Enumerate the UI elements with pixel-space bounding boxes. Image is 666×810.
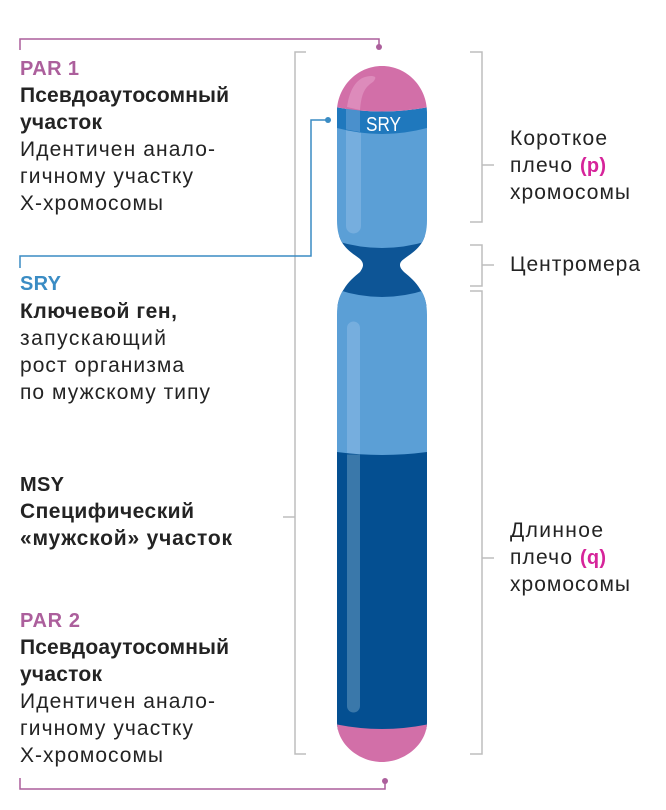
text block: PAR 2: PAR 2 (20, 610, 80, 632)
text block: PAR 1: PAR 1 (20, 58, 79, 80)
text block: PAR 2: участок (20, 663, 102, 686)
long arm dark part: MSY (337, 452, 427, 730)
bracket: centromere (470, 245, 494, 286)
text block: SRY: SRY (20, 273, 62, 295)
chromosome (337, 66, 427, 762)
long arm upper light part (337, 291, 427, 455)
text block: SRY: Ключевой ген, (20, 300, 177, 323)
highlight: PAR 1 (347, 76, 375, 110)
text block: PAR 1: Идентичен анало- (20, 138, 215, 161)
SRY band (337, 107, 427, 134)
connector: SRY (20, 117, 331, 268)
PAR 1 cap (337, 66, 427, 112)
label: long arm: (q) (580, 547, 606, 569)
text block: PAR 2: Псевдоаутосомный (20, 636, 229, 659)
label: long arm (510, 519, 630, 596)
label: long arm: Длинное (510, 519, 603, 542)
label: long arm: плечо (510, 546, 572, 569)
short arm (337, 128, 427, 248)
bracket: short arm (470, 52, 494, 222)
highlight: SRY band (346, 106, 360, 132)
text block: PAR 2: Идентичен анало- (20, 690, 215, 713)
centromere (338, 236, 426, 306)
SRY label: SRY (366, 114, 401, 136)
text block: SRY (20, 273, 210, 404)
text block: PAR 1 (20, 58, 229, 215)
text block: PAR 1: Псевдоаутосомный (20, 84, 229, 107)
bracket: whole chromosome (283, 52, 306, 754)
connector: PAR 1 (20, 39, 382, 50)
highlight: short arm (346, 125, 361, 234)
label: centromere: Центромера (510, 253, 640, 276)
label: long arm: хромосомы (510, 573, 630, 596)
text block: MSY: Специфический (20, 500, 194, 523)
label: short arm (510, 127, 630, 204)
text block: PAR 2: гичному участку (20, 717, 194, 740)
text block: MSY: MSY (20, 474, 65, 496)
label: short arm: плечо (510, 154, 572, 177)
text block: SRY: запускающий (20, 327, 166, 350)
label: short arm: хромосомы (510, 181, 630, 204)
label: short arm: (p) (580, 155, 606, 177)
text block: PAR 2: Х-хромосомы (20, 744, 163, 767)
text block: PAR 1: гичному участку (20, 165, 194, 188)
connector: PAR 2 (20, 778, 388, 789)
text block: PAR 2 (20, 610, 229, 767)
highlight: long arm light (347, 322, 360, 458)
text block: SRY: рост организма (20, 354, 184, 377)
text block: SRY: по мужскому типу (20, 381, 210, 404)
bracket: long arm (470, 291, 494, 754)
text block: PAR 1: Х-хромосомы (20, 192, 163, 215)
highlight: long arm dark (347, 454, 360, 712)
text block: MSY: «мужской» участок (20, 527, 232, 550)
PAR 2 cap (337, 724, 427, 762)
label: short arm: Короткое (510, 127, 607, 150)
text block: MSY (20, 474, 232, 550)
text block: PAR 1: участок (20, 111, 102, 134)
